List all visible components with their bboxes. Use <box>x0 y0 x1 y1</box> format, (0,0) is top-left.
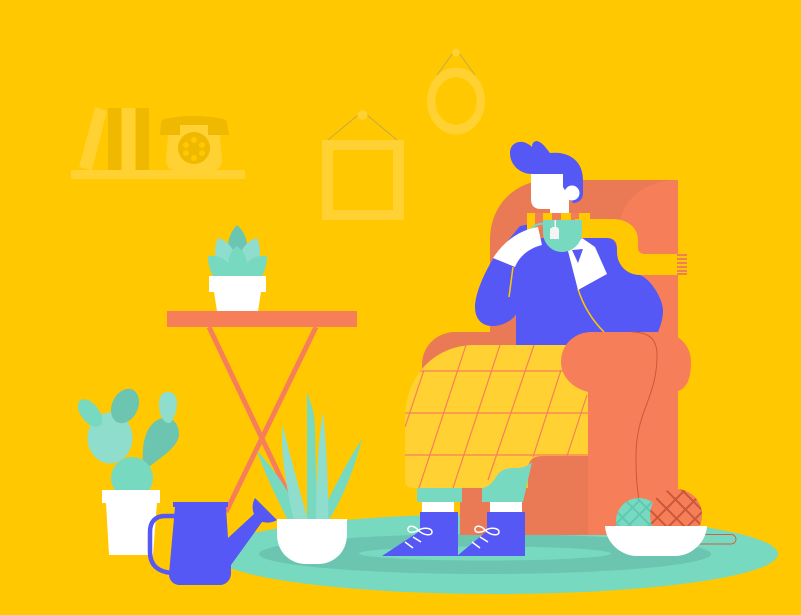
side table <box>167 311 357 512</box>
illustration: man drinking tea in an armchair <box>71 48 778 594</box>
hair <box>510 141 583 203</box>
scarf <box>527 213 687 275</box>
potted cactus <box>73 384 179 555</box>
man legs and shoes <box>382 462 532 556</box>
scarf band <box>575 219 678 275</box>
chair right arm <box>561 332 691 535</box>
thin arm line <box>509 267 513 297</box>
tea cup <box>529 220 582 252</box>
chair back <box>490 180 678 345</box>
wall shelf with books and telephone <box>71 107 245 179</box>
right sock <box>490 502 522 512</box>
icon: rotary telephone <box>160 116 229 170</box>
armchair <box>422 180 678 400</box>
orange yarn ball <box>650 489 702 526</box>
plaid blanket <box>400 345 590 488</box>
left shoe <box>382 512 458 556</box>
chair back highlight <box>617 180 678 345</box>
chair lower seat <box>460 456 600 535</box>
yarn thread loop <box>690 534 736 544</box>
potted aloe plant on rug <box>257 392 362 564</box>
chair seam and yarn thread <box>632 332 657 500</box>
teal yarn ball <box>616 498 653 526</box>
watering can <box>150 498 277 585</box>
shoe laces <box>405 526 499 548</box>
blanket grid lines <box>400 345 590 488</box>
tea bag tag <box>550 220 559 239</box>
right trouser leg <box>482 462 532 502</box>
yarn balls <box>616 489 702 526</box>
tie <box>572 249 583 263</box>
can body and spout <box>169 498 277 585</box>
scarf stripes <box>535 213 579 228</box>
man head <box>510 141 583 213</box>
left trouser cuff <box>417 488 462 502</box>
thin jacket line <box>578 289 604 332</box>
right shoe <box>457 512 525 556</box>
shelf board <box>71 170 245 179</box>
rug <box>212 514 778 594</box>
books <box>79 107 149 170</box>
white bowl <box>605 526 707 556</box>
face <box>531 170 569 213</box>
oval mirror <box>427 48 485 134</box>
man left arm <box>475 224 535 326</box>
shirt collar <box>568 238 607 290</box>
ear <box>564 186 580 200</box>
man sleeve cuff <box>493 227 542 267</box>
chair left arm <box>422 332 520 400</box>
can handle <box>150 516 175 573</box>
left sock <box>422 502 454 512</box>
square picture frame <box>322 110 404 220</box>
scarf fringe <box>677 254 687 275</box>
potted succulent on table <box>208 225 267 311</box>
man torso <box>516 238 663 345</box>
